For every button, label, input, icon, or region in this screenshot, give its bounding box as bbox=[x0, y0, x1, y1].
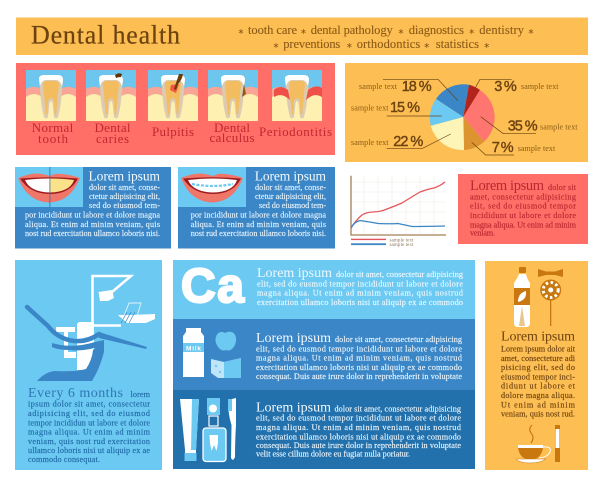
panel: every 6 months bbox=[15, 260, 162, 470]
icon: toothbrush bbox=[228, 398, 236, 460]
panel: red text block bbox=[458, 174, 588, 244]
text block: ullamco loboris nisi ut aliquip ex ae bbox=[28, 446, 150, 455]
panel: harmful foods bbox=[485, 261, 588, 470]
text block: exercitation ullamco loboris nisi ut aliquip ex ae commodo bbox=[257, 298, 463, 307]
topic tags: ∗ bbox=[238, 27, 244, 36]
legend bbox=[351, 238, 414, 248]
icon: apple bbox=[215, 332, 236, 351]
dental calculus: Dental bbox=[214, 120, 250, 135]
text block bbox=[191, 168, 326, 238]
text block: Ut enim ad minim bbox=[501, 400, 576, 409]
pie labels: 22 % bbox=[393, 134, 423, 150]
normal tooth: Normal bbox=[32, 120, 74, 135]
topic tags: ∗ bbox=[423, 41, 430, 50]
text block bbox=[257, 266, 463, 307]
icon: soda bottle bbox=[514, 267, 530, 327]
text block: ipsum dolor sit amet, consectetur bbox=[28, 400, 150, 409]
text block: elit, sed do eusmod tempor incididunt ut labore et dolore bbox=[257, 280, 463, 289]
topic tags bbox=[238, 23, 534, 51]
text block: commodo consequat. bbox=[28, 455, 100, 464]
text block: exercitation ullamco loboris nisi ut aliquip ex ae commodo bbox=[256, 432, 461, 441]
text block: magna aliqua. Ut enim ad minim veniam, quis nostrud bbox=[256, 354, 462, 363]
text block: dolor sit amet, conse- bbox=[255, 183, 326, 192]
icon: coffee cup bbox=[516, 425, 550, 463]
panel: dairy bbox=[173, 319, 475, 390]
dental caries: Dental bbox=[94, 120, 131, 135]
topic tags: tooth care bbox=[248, 23, 297, 37]
text block: velit esse cillum dolore eu fugiat nulla poriatur. bbox=[256, 450, 410, 459]
panel: red text block: elit, sed do eiusmod tempor bbox=[470, 202, 576, 211]
leader lines bbox=[383, 79, 536, 155]
legend: sample text bbox=[390, 238, 414, 244]
text block: nost rud exercitation ullamco loboris nisi. bbox=[25, 229, 160, 238]
text block: Lorem ipsum bbox=[257, 266, 332, 281]
icon: Ca symbol: Ca bbox=[181, 260, 244, 313]
pie labels: sample text bbox=[351, 138, 389, 147]
panel: red text block: veniam. bbox=[470, 229, 495, 238]
pie labels: sample text bbox=[351, 104, 389, 112]
text block: sed do eiusmod tem- bbox=[89, 201, 160, 210]
panel: red text block: magna aliqua. Ut enim ad minim bbox=[470, 220, 577, 229]
text block bbox=[256, 331, 462, 381]
dental calculus bbox=[208, 70, 258, 145]
pie labels: 7 % bbox=[492, 140, 514, 156]
title: Dental health bbox=[31, 20, 180, 50]
text block: por incididunt ut labore et dolore magna bbox=[191, 210, 326, 220]
text block bbox=[501, 330, 576, 419]
dental calculus: calculus bbox=[210, 130, 254, 145]
text block: dolore magna aliqua. bbox=[501, 391, 575, 400]
panel: tooth conditions bbox=[16, 63, 335, 155]
text block: veniam, quis nost rud. bbox=[501, 410, 575, 419]
text block: por incididunt ut labore et dolore magna bbox=[25, 210, 160, 220]
text block bbox=[256, 401, 461, 459]
text block: Every 6 months bbox=[28, 386, 123, 401]
pie labels: sample text bbox=[540, 122, 578, 132]
icon: cigarette bbox=[555, 425, 560, 462]
text block bbox=[25, 168, 160, 238]
topic tags: diagnostics bbox=[409, 23, 464, 37]
topic tags: statistics bbox=[436, 37, 479, 51]
text block: magna aliqua. Ut enim ad minim bbox=[28, 428, 151, 437]
dental caries bbox=[86, 70, 136, 146]
pie labels: sample text bbox=[359, 82, 398, 91]
text block: aliqua. Et enim ad minim veniam, quis bbox=[25, 220, 160, 229]
normal tooth: tooth bbox=[38, 131, 68, 146]
text block: adipisicing elit, sed do eiusmod bbox=[28, 409, 150, 418]
text block: Lorem ipsum bbox=[88, 168, 160, 184]
text block: consequat. Duis aute irure dolor in reprehenderit in voluptate bbox=[256, 441, 461, 450]
topic tags: ∗ bbox=[483, 41, 490, 50]
topic tags: dentistry bbox=[479, 23, 525, 37]
text block bbox=[28, 386, 151, 464]
icon: mouthwash bbox=[203, 398, 226, 462]
topic tags: ∗ bbox=[300, 27, 307, 36]
text block: dolor sit amet, conse- bbox=[89, 183, 160, 192]
periodontitis: Periodontitis bbox=[259, 124, 332, 139]
topic tags: dental pathology bbox=[311, 23, 393, 37]
dental caries: caries bbox=[96, 131, 129, 146]
panel: braces bbox=[178, 167, 335, 248]
pie labels: 15 % bbox=[390, 100, 420, 116]
panel: pie chart bbox=[345, 63, 588, 162]
text block: elit, sed do eusmod tempor incididunt ut labore et dolore bbox=[256, 414, 461, 423]
pie labels bbox=[351, 79, 578, 156]
text block: Lorem ipsum bbox=[501, 330, 575, 345]
topic tags: ∗ bbox=[346, 41, 353, 50]
panel: red text block: amet, consectetur adipisicing bbox=[470, 192, 576, 202]
icon: dental chair bbox=[27, 276, 155, 381]
topic tags: ∗ bbox=[528, 27, 534, 36]
text block: veniam, quis nost rud exercitation bbox=[28, 437, 150, 446]
icon: candy bbox=[538, 269, 563, 277]
topic tags: ∗ bbox=[398, 27, 404, 36]
pie labels: sample text bbox=[521, 82, 559, 91]
text block: magna aliqua. Ut enim ad minim veniam, quis nostrud bbox=[256, 423, 461, 432]
icon: lollipop bbox=[540, 280, 561, 326]
line chart bbox=[351, 176, 446, 248]
text block: aliqua. Et enim ad minim veniam, quis bbox=[191, 220, 326, 229]
pie labels: 3 % bbox=[494, 79, 517, 95]
text block: lorem bbox=[130, 390, 151, 399]
text block: dolor sit amet, consectetur adipisicing bbox=[335, 335, 462, 344]
pie chart bbox=[430, 84, 495, 150]
icon: milk carton bbox=[183, 328, 204, 377]
text block: tempor incididun ut labore et dolore bbox=[28, 418, 150, 427]
text block: pisicing elit, sed do bbox=[501, 363, 575, 372]
text block: Lorem ipsum bbox=[255, 168, 326, 184]
panel: red text block: incididunt ut labore et dolore bbox=[470, 211, 576, 220]
text block: nost rud exercitation ullamco loboris nisi. bbox=[191, 229, 326, 238]
panel: red text block: dolor sit bbox=[548, 183, 577, 192]
panel: oral hygiene bbox=[173, 390, 475, 469]
icon: smile whitening bbox=[18, 167, 80, 207]
header band bbox=[16, 18, 588, 55]
topic tags: ∗ bbox=[468, 27, 475, 36]
panel: whitening bbox=[15, 167, 171, 248]
pulpitis: Pulpitis bbox=[152, 124, 194, 139]
text block: dolor sit amet, consectetur adipisicing bbox=[334, 405, 461, 414]
text block: didunt ut labore et bbox=[501, 382, 576, 391]
text block: sed do eiusmod tem- bbox=[259, 201, 326, 210]
text block: Lorem ipsum dolor ait bbox=[501, 345, 576, 354]
periodontitis bbox=[259, 70, 332, 139]
legend: sample text bbox=[390, 243, 414, 248]
icon: cheese bbox=[211, 358, 241, 378]
icon: toothpaste bbox=[180, 399, 199, 461]
text block: ctetur adipisicing elit, bbox=[255, 192, 326, 201]
text block: magna aliqua. Ut enim ad minim veniam, quis nostrud bbox=[257, 289, 463, 298]
pie labels: sample text bbox=[518, 144, 556, 153]
text block: ctetur adipisicing elit, bbox=[89, 192, 160, 201]
icon: milk carton: Milk bbox=[186, 346, 201, 352]
text block: consequat. Duis aute irure dolor in reprehenderit in voluptate bbox=[256, 372, 462, 381]
pulpitis bbox=[148, 70, 198, 139]
text block: elit, sed do eusmod tempor incididunt ut labore et dolore bbox=[256, 345, 462, 354]
pie labels: 18 % bbox=[402, 79, 432, 95]
text block: exercitation ullamco loboris nisi ut aliquip ex ae commodo bbox=[256, 363, 462, 372]
text block: Lorem ipsum bbox=[256, 401, 331, 416]
topic tags: ∗ bbox=[273, 41, 279, 50]
icon: smile with braces bbox=[181, 174, 243, 202]
topic tags: preventions bbox=[283, 37, 340, 51]
text block: amet, consecteture adi bbox=[501, 354, 576, 363]
topic tags: orthodontics bbox=[357, 37, 420, 51]
pie labels: 35 % bbox=[508, 118, 538, 134]
text block: Lorem ipsum bbox=[256, 331, 331, 346]
text block: dolor sit amet, consectetur adipisicing bbox=[336, 270, 463, 279]
normal tooth bbox=[26, 70, 76, 146]
panel: red text block: Lorem ipsum bbox=[470, 178, 545, 194]
panel: calcium bbox=[173, 260, 475, 319]
text block: eiusmod tempor inci- bbox=[501, 373, 575, 382]
